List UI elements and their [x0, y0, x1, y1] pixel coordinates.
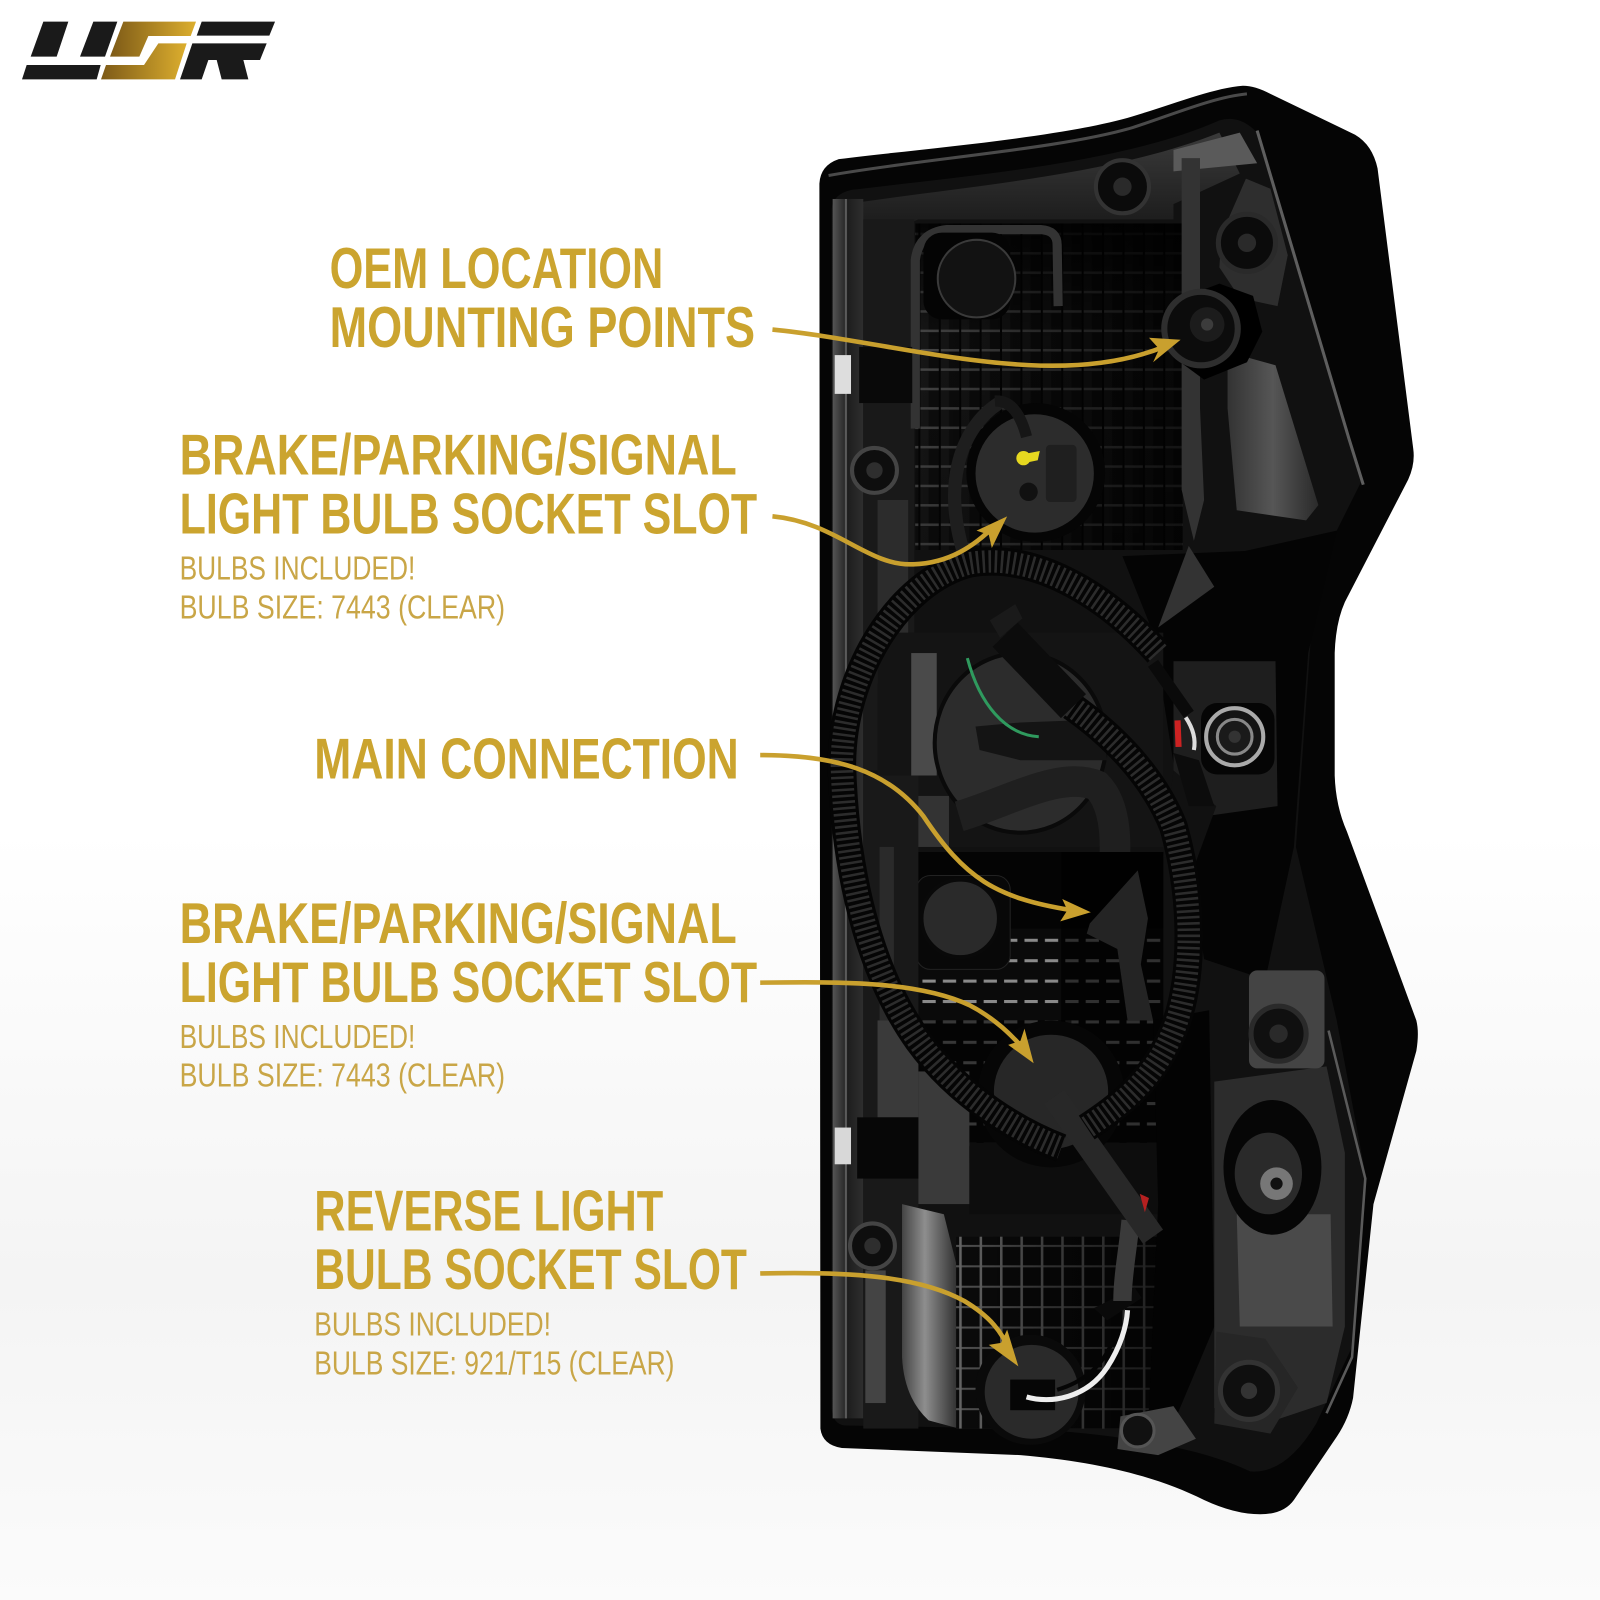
bottom screw [1117, 1406, 1196, 1455]
right bulb socket [1223, 1100, 1321, 1235]
black divider band [1148, 1010, 1214, 1429]
lower left frame [863, 776, 918, 1429]
corrugated loom right loop [1071, 706, 1189, 1128]
callout 2: upper brake socket: BULBS INCLUDED! [180, 551, 415, 588]
white clip lower [835, 1117, 918, 1179]
arrow 5 [760, 1273, 1018, 1366]
screw boss top [1096, 160, 1149, 213]
callout 5: reverse socket: BULBS INCLUDED! [314, 1307, 551, 1344]
shaded band under lower socket [969, 1143, 1163, 1214]
lower round plug [916, 876, 1010, 969]
corrugated loom left loop [842, 561, 1158, 1148]
callout 5: reverse socket [314, 1180, 747, 1382]
red mark [1140, 1194, 1149, 1212]
callout 1: mounting points: OEM LOCATION [330, 237, 663, 301]
arrow 1 [772, 330, 1181, 366]
white clip upper [835, 347, 912, 403]
arrow 2 [772, 516, 1007, 564]
callout 2: upper brake socket: BRAKE/PARKING/SIGNAL [180, 423, 737, 487]
upper left frame [863, 219, 914, 770]
main connection panel [1173, 661, 1278, 816]
top translucent band [847, 133, 1240, 245]
zip tie [990, 604, 1022, 638]
wire tail [1054, 1097, 1153, 1237]
callout 1: mounting points [330, 237, 755, 360]
callout 4: lower brake socket: BULBS INCLUDED! [180, 1019, 415, 1056]
upper right screw panel [1219, 179, 1288, 306]
arrow 3 [760, 755, 1091, 921]
callout 3: main connection: MAIN CONNECTION [314, 728, 739, 792]
reflector wedge [1158, 546, 1214, 628]
callout 4: lower brake socket [180, 892, 757, 1095]
callout 1: mounting points: MOUNTING POINTS [330, 296, 755, 360]
inner cavity [832, 119, 1365, 1472]
logo [22, 22, 275, 79]
bottom lens grid [956, 1237, 1160, 1429]
lower right panel [1214, 1066, 1345, 1423]
top right gloss patch [1173, 133, 1257, 171]
callout 2: upper brake socket [180, 423, 757, 626]
light strip along upper right [1257, 131, 1363, 485]
callout 2: upper brake socket: LIGHT BULB SOCKET SLOT [180, 483, 757, 547]
coloured wires [967, 658, 1214, 806]
callout 4: lower brake socket: BULB SIZE: 7443 (CLEAR) [180, 1058, 505, 1095]
connector block right [1163, 770, 1216, 867]
callout 4: lower brake socket: LIGHT BULB SOCKET SLOT [180, 951, 757, 1015]
arrow 4 [760, 982, 1034, 1063]
screw boss left upper [852, 448, 897, 493]
lens lit area above gloss [918, 1071, 969, 1204]
column beside grid [1182, 158, 1204, 541]
main connection screw [1201, 703, 1274, 774]
callout 2: upper brake socket: BULB SIZE: 7443 (CLEAR) [180, 589, 505, 626]
reverse bulb socket [976, 1220, 1142, 1445]
bottom glossy lens [902, 1204, 959, 1429]
upper bulb socket [955, 401, 1105, 569]
rim lower right [1327, 1031, 1365, 1413]
lower bulb socket [978, 1020, 1124, 1167]
callout 5: reverse socket: REVERSE LIGHT [314, 1180, 663, 1244]
tail light housing [819, 86, 1418, 1514]
gloss rim top [829, 94, 1247, 176]
left edge strip [833, 199, 863, 1418]
callout 5: reverse socket: BULB SIZE: 921/T15 (CLEAR) [314, 1345, 674, 1382]
lower lens grid [918, 852, 1163, 1163]
lower right screw block [1249, 970, 1324, 1068]
callout 5: reverse socket: BULB SOCKET SLOT [314, 1238, 747, 1302]
black central body [1122, 531, 1337, 980]
screw boss upper right [1218, 214, 1276, 271]
plug frame upper [915, 230, 1058, 429]
upper round plug [923, 233, 1015, 319]
lower translucent panel [1228, 352, 1318, 520]
outer lens body [819, 86, 1418, 1514]
taped connector [1005, 635, 1073, 706]
screw boss left lower [850, 1223, 895, 1268]
middle connector housing [878, 633, 1163, 888]
mounting point [1164, 284, 1262, 380]
main plug boot [1087, 870, 1153, 1020]
bottom right screw [1214, 1332, 1298, 1434]
lower left frame detail [865, 1270, 886, 1403]
callout 4: lower brake socket: BRAKE/PARKING/SIGNAL [180, 892, 737, 956]
upper lens grid [915, 223, 1183, 550]
